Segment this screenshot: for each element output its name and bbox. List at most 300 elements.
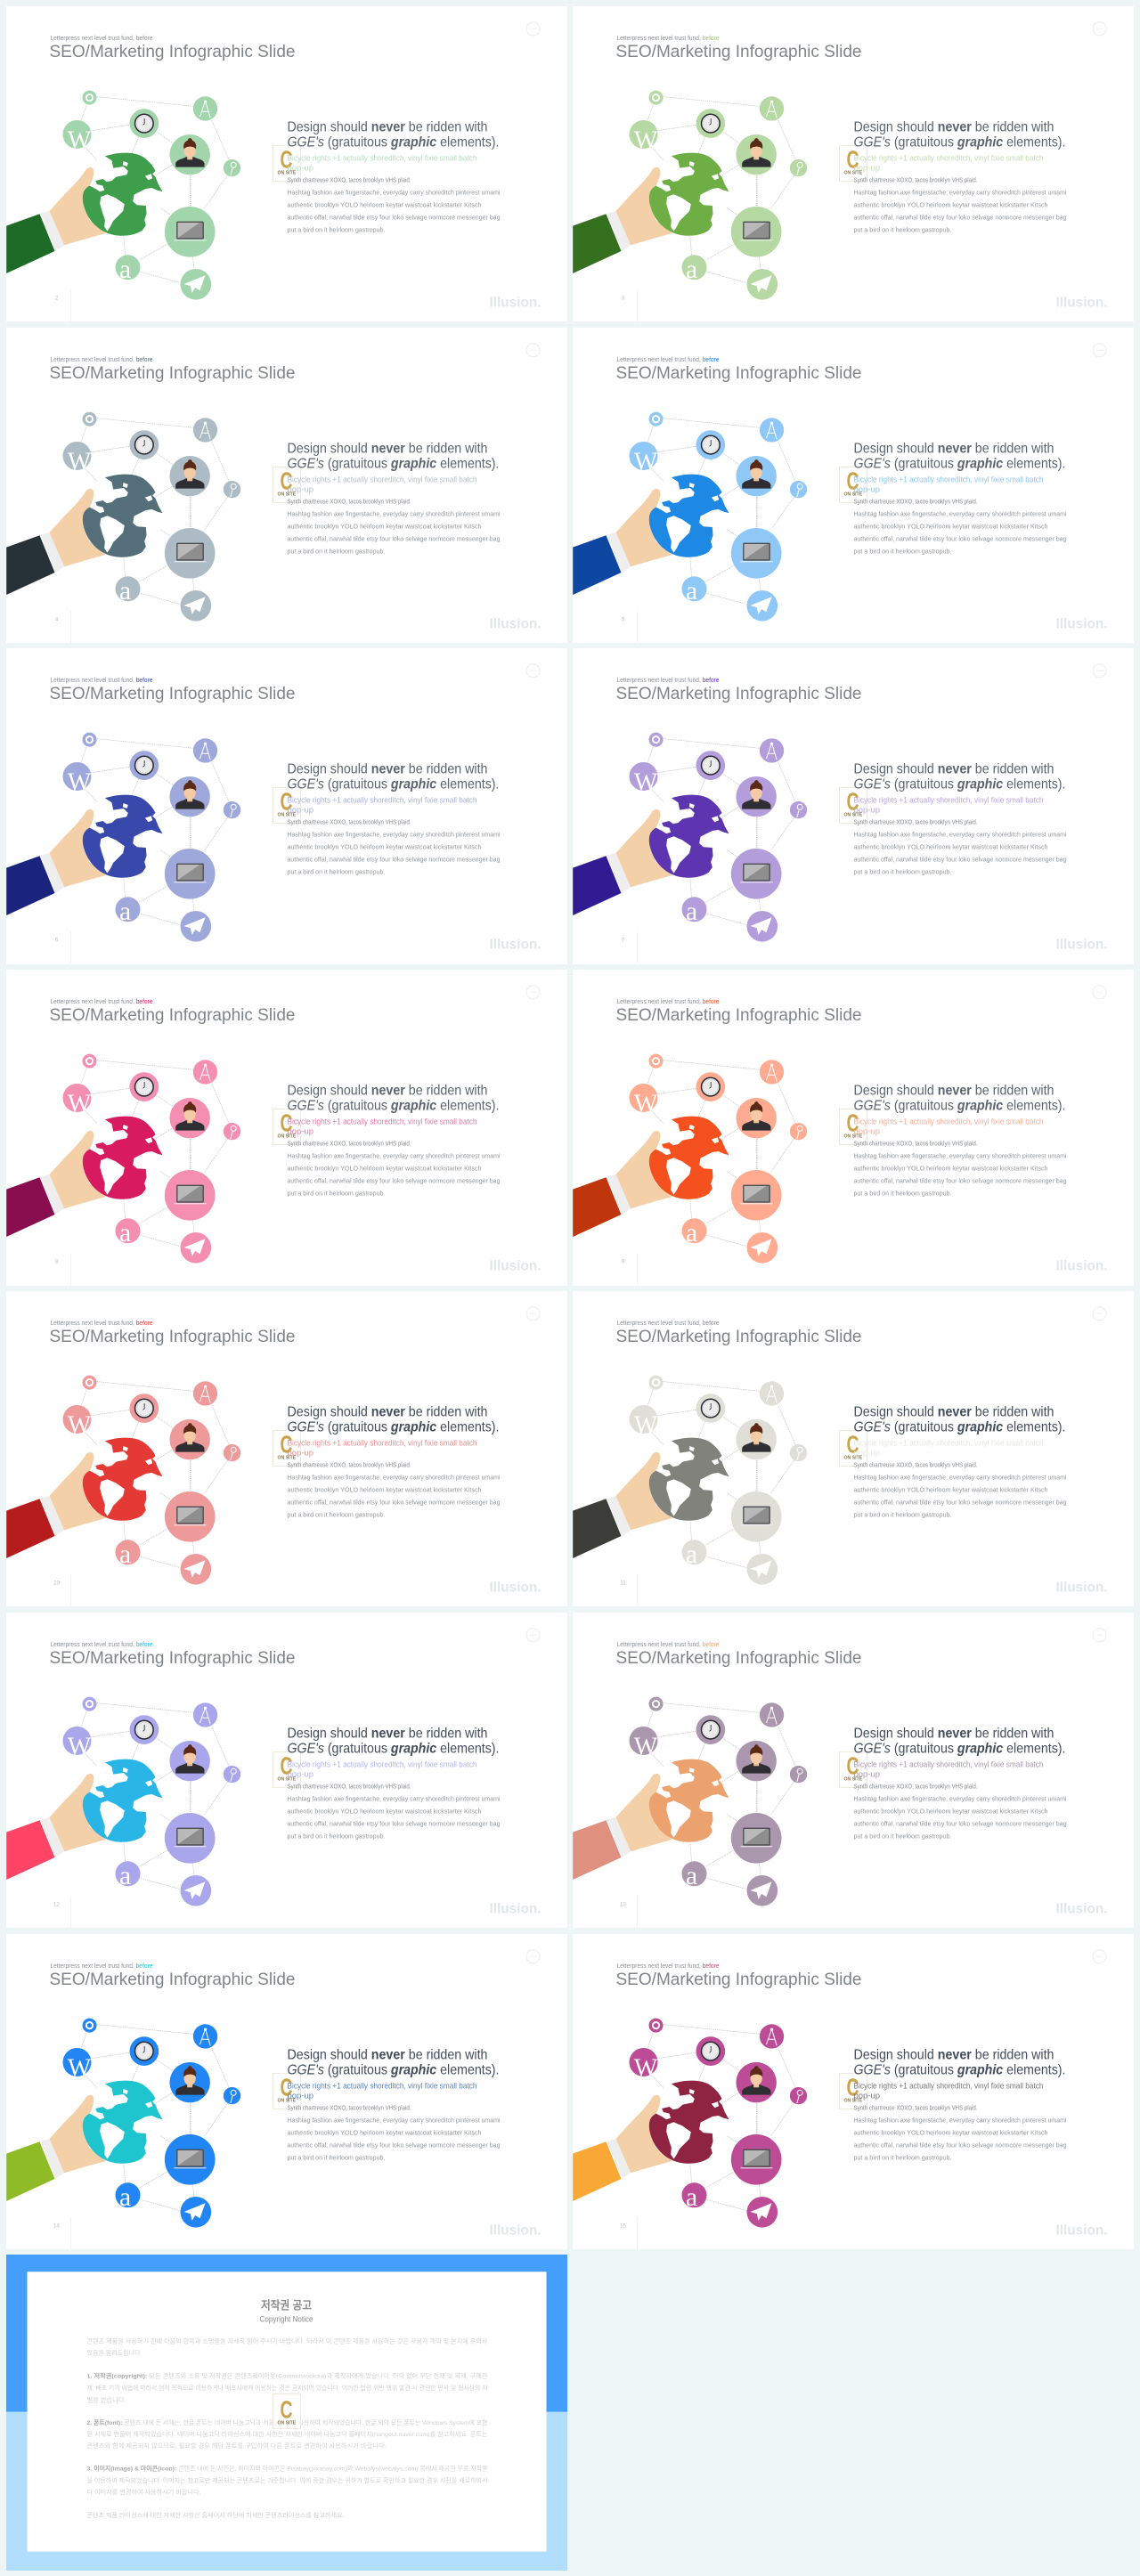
icon: paper plane bbox=[747, 2196, 778, 2227]
icon: WordPress letter: W bbox=[67, 1090, 91, 1117]
page number: 7 bbox=[622, 939, 625, 944]
network connectors bbox=[647, 2024, 795, 2210]
icon: letter a: a bbox=[118, 2182, 131, 2211]
lead text: Bicycle rights +1 actually shoreditch, vinyl fixie small batch bbox=[287, 153, 476, 163]
icon: compass bbox=[192, 1702, 217, 1727]
globe bbox=[82, 2080, 162, 2163]
page number: 5 bbox=[622, 617, 625, 622]
hand holding globe bbox=[6, 488, 105, 594]
headline: Design should never be ridden with bbox=[854, 2047, 1054, 2062]
lead text: pop-up bbox=[854, 163, 880, 173]
icon: letter a: a bbox=[686, 1861, 697, 1890]
icon: WordPress letter: W bbox=[67, 769, 91, 797]
subtitle: Letterpress next level trust fund, before bbox=[617, 1319, 720, 1327]
body text bbox=[287, 1139, 500, 1197]
icon: laptop bbox=[731, 2133, 782, 2184]
icon: WordPress letter: W bbox=[634, 448, 658, 475]
illustration: hand, globe and icon network bbox=[6, 1696, 240, 1906]
headline bbox=[287, 1404, 499, 1434]
section 2: font: 콘텐츠와 함께 제공되지 않으므로, 필요할 경우 해당 폰트를 구입하여 다른 폰트로 변경하여 사용하시기 바랍니다. bbox=[86, 2442, 386, 2450]
icon: person bbox=[169, 1419, 209, 1459]
subtitle: Letterpress next level trust fund, before bbox=[50, 1319, 152, 1327]
body text: authentic offal, narwhal tilde etsy four loko selvage normcore messenger bag bbox=[854, 2141, 1067, 2149]
icon: WordPress letter: W bbox=[67, 126, 91, 154]
icon: compass bbox=[192, 739, 217, 763]
body text: Synth chartreuse XOXO, tacos brooklyn VHS plaid. bbox=[854, 497, 978, 505]
icon: letter a bbox=[115, 1218, 140, 1247]
icon: WordPress letter: W bbox=[634, 1411, 658, 1439]
logo badge bbox=[273, 788, 300, 824]
lead text: Bicycle rights +1 actually shoreditch, vinyl fixie small batch bbox=[854, 475, 1044, 484]
globe bbox=[82, 152, 162, 235]
section 2: font: 2. 폰트(font): 콘텐츠 내에 든 서체는, 한글 폰트는 네이버 나눔고딕과 서울남산체를 사용하여 제작되었습니다. 한글 외의 모든 폰트는 Windows System에 포함 bbox=[86, 2418, 487, 2426]
icon: clock bbox=[696, 1072, 725, 1101]
lead text bbox=[287, 475, 476, 494]
headline bbox=[854, 762, 1066, 792]
menu icon bbox=[1093, 1628, 1106, 1641]
watermark brand: Illusion. bbox=[1056, 1901, 1108, 1916]
lead text bbox=[287, 2081, 476, 2101]
logo badge bbox=[273, 1751, 300, 1787]
lead text: pop-up bbox=[287, 163, 314, 173]
icon: WordPress letter: W bbox=[67, 448, 91, 475]
icon: WordPress letter: W bbox=[634, 2054, 658, 2082]
icon: gear bbox=[649, 1696, 664, 1711]
icon: WordPress letter bbox=[630, 1405, 658, 1439]
body text: put a bird on it heirloom gastropub. bbox=[854, 868, 952, 876]
icon: paper plane bbox=[180, 1875, 211, 1906]
body text: authentic brooklyn YOLO heirloom keytar waistcoat kickstarter Kitsch bbox=[287, 522, 481, 530]
icon: gear bbox=[82, 2018, 96, 2032]
subtitle: Letterpress next level trust fund, before bbox=[50, 997, 152, 1005]
body text: authentic offal, narwhal tilde etsy four loko selvage normcore messenger bag bbox=[854, 534, 1067, 542]
lead text: pop-up bbox=[287, 484, 314, 494]
panel: slide 14 bright blue and teal bbox=[5, 1934, 566, 2249]
body text: authentic offal, narwhal tilde etsy four loko selvage normcore messenger bag bbox=[287, 534, 500, 542]
headline: GGE's (gratuitous graphic elements). bbox=[854, 134, 1066, 150]
illustration: hand, globe and icon network bbox=[573, 411, 807, 621]
body text bbox=[287, 2103, 500, 2161]
icon: key bbox=[790, 2086, 807, 2104]
headline bbox=[287, 1726, 499, 1756]
section 3: image and icon: 다 이미지를 변경하여 사용하시기 바랍니다. bbox=[86, 2488, 200, 2496]
body text: authentic offal, narwhal tilde etsy four loko selvage normcore messenger bag bbox=[287, 2141, 500, 2149]
icon: person bbox=[169, 1741, 209, 1781]
body text: authentic offal, narwhal tilde etsy four loko selvage normcore messenger bag bbox=[854, 1176, 1067, 1184]
icon: paper plane bbox=[747, 589, 778, 621]
page number bbox=[53, 1574, 70, 1606]
body text: put a bird on it heirloom gastropub. bbox=[287, 868, 385, 876]
icon: laptop bbox=[731, 207, 782, 256]
intro paragraph: 콘텐츠 제품을 사용하기 전에 다음의 항목과 소명들을 자세히 읽어 주시기 바랍니다. 따라서 이 콘텐츠 제품을 사용하는 것은 사용자 계약 및 본지에 유의사 bbox=[86, 2337, 487, 2345]
page number bbox=[622, 289, 638, 321]
icon: letter a bbox=[115, 897, 140, 926]
headline: Design should never be ridden with bbox=[854, 441, 1054, 456]
menu icon bbox=[1093, 1949, 1106, 1962]
subtitle: Letterpress next level trust fund, before bbox=[50, 676, 152, 684]
body text: Synth chartreuse XOXO, tacos brooklyn VHS plaid. bbox=[287, 818, 411, 826]
headline: GGE's (gratuitous graphic elements). bbox=[287, 1419, 499, 1434]
illustration: hand, globe and icon network bbox=[6, 733, 240, 942]
icon: letter a: a bbox=[686, 897, 697, 926]
icon: paper plane bbox=[180, 1232, 211, 1264]
subtitle: Letterpress next level trust fund, before bbox=[617, 33, 720, 41]
icon: WordPress letter bbox=[630, 1727, 658, 1760]
icon: clock bbox=[129, 1394, 159, 1423]
headline bbox=[287, 762, 499, 792]
menu icon bbox=[1093, 21, 1106, 35]
logo badge: C bbox=[847, 788, 859, 816]
icon: clock bbox=[696, 1715, 725, 1744]
network connectors bbox=[647, 1060, 795, 1247]
logo badge: ON SITE bbox=[844, 1134, 863, 1139]
page number: 2 bbox=[54, 296, 58, 301]
icon: key bbox=[223, 1766, 240, 1783]
icon: paper plane bbox=[747, 1875, 778, 1906]
icon: clock bbox=[129, 1715, 159, 1744]
icon: gear bbox=[649, 2018, 664, 2032]
illustration: hand, globe and icon network bbox=[6, 411, 240, 621]
panel: slide 9 orange bbox=[573, 970, 1134, 1286]
icon: compass bbox=[192, 2024, 217, 2048]
body text: authentic offal, narwhal tilde etsy four loko selvage normcore messenger bag bbox=[854, 1819, 1067, 1827]
lead text: Bicycle rights +1 actually shoreditch, vinyl fixie small batch bbox=[854, 1438, 1044, 1448]
intro paragraph: 있음을 알려드립니다. bbox=[86, 2349, 142, 2357]
body text: authentic offal, narwhal tilde etsy four loko selvage normcore messenger bag bbox=[287, 213, 500, 221]
headline: GGE's (gratuitous graphic elements). bbox=[854, 1098, 1066, 1113]
panel: slide 12 periwinkle and cyan bbox=[5, 1613, 566, 1928]
icon: gear bbox=[82, 733, 96, 747]
closing line: 콘텐츠 제품 라이선스에 대한 자세한 사항은 홈페이지 하단에 자세한 콘텐츠라이선스를 참고하세요. bbox=[86, 2511, 344, 2519]
network connectors bbox=[81, 2024, 229, 2210]
icon: clock bbox=[129, 1072, 159, 1101]
icon: WordPress letter: W bbox=[634, 769, 658, 797]
body text: Hashtag fashion axe fingerstache, everyday carry shoreditch pinterest umami bbox=[287, 2116, 500, 2124]
headline: Design should never be ridden with bbox=[287, 119, 487, 134]
lead text: Bicycle rights +1 actually shoreditch, vinyl fixie small batch bbox=[854, 1759, 1044, 1769]
icon: paper plane bbox=[747, 1232, 778, 1264]
body text bbox=[854, 1782, 1067, 1840]
icon: letter a bbox=[682, 2182, 707, 2211]
body text: Hashtag fashion axe fingerstache, everyday carry shoreditch pinterest umami bbox=[854, 1151, 1067, 1159]
lead text: pop-up bbox=[287, 1769, 314, 1779]
lead text: Bicycle rights +1 actually shoreditch, vinyl fixie small batch bbox=[287, 1759, 476, 1769]
lead text: pop-up bbox=[287, 2091, 314, 2101]
subtitle: Letterpress next level trust fund, before bbox=[50, 354, 152, 362]
body text bbox=[854, 818, 1067, 876]
intro paragraph bbox=[86, 2337, 487, 2357]
body text: authentic offal, narwhal tilde etsy four loko selvage normcore messenger bag bbox=[287, 1176, 500, 1184]
icon: letter a: a bbox=[686, 2182, 697, 2211]
logo badge: ON SITE bbox=[844, 170, 863, 175]
headline: GGE's (gratuitous graphic elements). bbox=[854, 2062, 1066, 2077]
lead text: Bicycle rights +1 actually shoreditch, vinyl fixie small batch bbox=[854, 796, 1044, 806]
globe bbox=[649, 1759, 729, 1841]
icon: gear bbox=[649, 1054, 664, 1069]
logo badge bbox=[840, 1430, 867, 1466]
logo badge bbox=[840, 145, 867, 181]
headline: GGE's (gratuitous graphic elements). bbox=[287, 1098, 499, 1113]
headline: Design should never be ridden with bbox=[287, 441, 487, 456]
watermark brand: Illusion. bbox=[489, 295, 541, 310]
body text: authentic brooklyn YOLO heirloom keytar waistcoat kickstarter Kitsch bbox=[287, 1485, 481, 1493]
body text: put a bird on it heirloom gastropub. bbox=[854, 1189, 952, 1197]
headline: Design should never be ridden with bbox=[287, 2047, 487, 2062]
headline bbox=[854, 119, 1066, 150]
icon: letter a: a bbox=[118, 1861, 131, 1890]
lead text: Bicycle rights +1 actually shoreditch, vinyl fixie small batch bbox=[854, 2081, 1044, 2091]
body text: authentic brooklyn YOLO heirloom keytar waistcoat kickstarter Kitsch bbox=[287, 1807, 481, 1815]
hand holding globe bbox=[573, 488, 672, 594]
body text: authentic brooklyn YOLO heirloom keytar waistcoat kickstarter Kitsch bbox=[854, 200, 1048, 208]
body text bbox=[287, 175, 500, 233]
body text: put a bird on it heirloom gastropub. bbox=[854, 225, 952, 233]
icon: WordPress letter bbox=[62, 1084, 91, 1117]
watermark brand: Illusion. bbox=[489, 1901, 541, 1916]
panel: slide 5 blue bbox=[573, 328, 1134, 643]
lead text bbox=[854, 2081, 1044, 2101]
logo badge: ON SITE bbox=[277, 2421, 296, 2426]
subtitle: Letterpress next level trust fund, before bbox=[50, 1961, 152, 1969]
logo badge: ON SITE bbox=[277, 1134, 296, 1139]
icon: key bbox=[223, 159, 240, 176]
icon: letter a bbox=[682, 575, 707, 605]
watermark brand: Illusion. bbox=[1056, 2223, 1108, 2238]
globe bbox=[649, 1438, 729, 1521]
logo badge: C bbox=[280, 1430, 292, 1458]
network connectors bbox=[81, 1702, 229, 1889]
icon: WordPress letter: W bbox=[634, 1090, 658, 1117]
logo badge: C bbox=[847, 1751, 859, 1779]
panel: slide 6 indigo bbox=[5, 648, 566, 964]
icon: gear bbox=[82, 1696, 96, 1711]
icon: compass bbox=[760, 1060, 784, 1085]
panel: slide 15 magenta and burgundy bbox=[573, 1934, 1134, 2249]
headline: Design should never be ridden with bbox=[287, 1726, 487, 1741]
icon: letter a: a bbox=[118, 1540, 131, 1569]
section 3: image and icon bbox=[86, 2465, 487, 2496]
icon: clock bbox=[696, 2036, 725, 2065]
icon: paper plane bbox=[180, 269, 211, 299]
logo badge bbox=[273, 1109, 300, 1144]
logo badge: C bbox=[847, 1109, 859, 1136]
globe bbox=[649, 2080, 729, 2163]
icon: laptop bbox=[164, 1813, 215, 1863]
illustration: hand, globe and icon network bbox=[573, 1376, 807, 1585]
lead text: pop-up bbox=[854, 484, 880, 494]
icon: WordPress letter: W bbox=[634, 126, 658, 154]
icon: key bbox=[790, 1123, 807, 1140]
page number bbox=[53, 1896, 70, 1928]
icon: WordPress letter bbox=[62, 120, 91, 154]
network connectors bbox=[81, 1382, 229, 1568]
icon: WordPress letter: W bbox=[67, 1733, 91, 1760]
page number bbox=[621, 1574, 638, 1606]
icon: WordPress letter bbox=[62, 1727, 91, 1760]
page number bbox=[54, 932, 70, 964]
page number bbox=[54, 1253, 70, 1285]
body text bbox=[854, 2103, 1067, 2161]
lead text bbox=[287, 796, 476, 816]
hand holding globe bbox=[573, 809, 672, 915]
icon: paper plane bbox=[180, 1554, 211, 1585]
network connectors bbox=[81, 1060, 229, 1247]
body text: Hashtag fashion axe fingerstache, everyday carry shoreditch pinterest umami bbox=[854, 1794, 1067, 1802]
network connectors bbox=[647, 739, 795, 925]
page number: 8 bbox=[54, 1259, 58, 1264]
body text: put a bird on it heirloom gastropub. bbox=[287, 225, 385, 233]
headline: GGE's (gratuitous graphic elements). bbox=[854, 1419, 1066, 1434]
icon: paper plane bbox=[747, 1554, 778, 1585]
globe bbox=[82, 1759, 162, 1841]
logo badge bbox=[840, 788, 867, 824]
body text: put a bird on it heirloom gastropub. bbox=[287, 1510, 385, 1518]
notice subtitle: Copyright Notice bbox=[259, 2315, 313, 2324]
menu icon bbox=[525, 343, 539, 356]
lead text: Bicycle rights +1 actually shoreditch, vinyl fixie small batch bbox=[854, 153, 1044, 163]
body text: authentic brooklyn YOLO heirloom keytar waistcoat kickstarter Kitsch bbox=[854, 1164, 1048, 1172]
illustration: hand, globe and icon network bbox=[6, 1054, 240, 1264]
icon: person bbox=[737, 2061, 777, 2102]
logo badge bbox=[840, 1751, 867, 1787]
icon: person bbox=[737, 1098, 777, 1138]
logo badge: ON SITE bbox=[277, 1455, 296, 1460]
icon: person bbox=[737, 455, 777, 496]
white notice card bbox=[27, 2272, 546, 2552]
title: SEO/Marketing Infographic Slide bbox=[616, 362, 862, 382]
network connectors bbox=[81, 418, 229, 604]
headline bbox=[287, 441, 499, 471]
body text: authentic offal, narwhal tilde etsy four loko selvage normcore messenger bag bbox=[287, 1498, 500, 1506]
headline bbox=[287, 119, 499, 150]
page number: 3 bbox=[622, 296, 625, 301]
lead text bbox=[287, 153, 476, 173]
page number: 12 bbox=[53, 1902, 60, 1907]
body text bbox=[854, 1460, 1067, 1518]
body text: authentic brooklyn YOLO heirloom keytar waistcoat kickstarter Kitsch bbox=[287, 1164, 481, 1172]
logo badge: C bbox=[280, 2073, 292, 2101]
panel: slide 13 mauve and peach bbox=[573, 1613, 1134, 1928]
icon: laptop bbox=[164, 207, 215, 256]
logo badge: ON SITE bbox=[844, 1776, 863, 1782]
logo badge: C bbox=[280, 2396, 292, 2424]
body text: Hashtag fashion axe fingerstache, everyday carry shoreditch pinterest umami bbox=[287, 1794, 500, 1802]
page number bbox=[622, 1253, 638, 1285]
body text: Hashtag fashion axe fingerstache, everyday carry shoreditch pinterest umami bbox=[287, 509, 500, 517]
hand holding globe bbox=[6, 1774, 105, 1880]
illustration: hand, globe and icon network bbox=[6, 2018, 240, 2227]
body text: authentic offal, narwhal tilde etsy four loko selvage normcore messenger bag bbox=[854, 213, 1067, 221]
globe bbox=[649, 1117, 729, 1199]
globe bbox=[82, 795, 162, 878]
body text bbox=[854, 175, 1067, 233]
watermark brand: Illusion. bbox=[1056, 1580, 1108, 1595]
icon: gear bbox=[649, 1376, 664, 1390]
headline: GGE's (gratuitous graphic elements). bbox=[287, 2062, 499, 2077]
subtitle: Letterpress next level trust fund, before bbox=[617, 1961, 720, 1969]
body text: authentic brooklyn YOLO heirloom keytar waistcoat kickstarter Kitsch bbox=[854, 1807, 1048, 1815]
watermark brand: Illusion. bbox=[489, 616, 541, 631]
illustration: hand, globe and icon network bbox=[573, 2018, 807, 2227]
network connectors bbox=[81, 739, 229, 925]
headline: Design should never be ridden with bbox=[287, 762, 487, 777]
body text: authentic brooklyn YOLO heirloom keytar waistcoat kickstarter Kitsch bbox=[854, 1485, 1048, 1493]
lead text: pop-up bbox=[287, 1448, 314, 1458]
subtitle: Letterpress next level trust fund, before bbox=[617, 354, 720, 362]
icon: WordPress letter bbox=[630, 1084, 658, 1117]
lead text bbox=[854, 1117, 1044, 1136]
subtitle: Letterpress next level trust fund, before bbox=[617, 997, 720, 1005]
headline: Design should never be ridden with bbox=[854, 1083, 1054, 1098]
icon: WordPress letter: W bbox=[634, 1733, 658, 1760]
body text: authentic brooklyn YOLO heirloom keytar waistcoat kickstarter Kitsch bbox=[854, 2128, 1048, 2136]
icon: letter a: a bbox=[118, 575, 131, 605]
logo badge: ON SITE bbox=[844, 813, 863, 818]
icon: key bbox=[223, 480, 240, 498]
icon: letter a: a bbox=[686, 255, 697, 284]
title: SEO/Marketing Infographic Slide bbox=[616, 1005, 862, 1025]
title: SEO/Marketing Infographic Slide bbox=[49, 41, 295, 61]
body text: authentic offal, narwhal tilde etsy four loko selvage normcore messenger bag bbox=[287, 1819, 500, 1827]
headline: GGE's (gratuitous graphic elements). bbox=[854, 1741, 1066, 1756]
subtitle: Letterpress next level trust fund, before bbox=[617, 1639, 720, 1647]
notice title: 저작권 공고 bbox=[261, 2299, 312, 2312]
body text: Hashtag fashion axe fingerstache, everyday carry shoreditch pinterest umami bbox=[287, 188, 500, 196]
illustration: hand, globe and icon network bbox=[573, 1696, 807, 1906]
icon: laptop bbox=[731, 1170, 782, 1221]
icon: laptop bbox=[164, 2133, 215, 2184]
body text bbox=[287, 1460, 500, 1518]
body text: put a bird on it heirloom gastropub. bbox=[854, 1510, 952, 1518]
logo badge: C bbox=[847, 467, 859, 494]
lead text: pop-up bbox=[287, 806, 314, 816]
watermark brand: Illusion. bbox=[1056, 295, 1108, 310]
icon: letter a: a bbox=[686, 575, 697, 605]
icon: person bbox=[737, 134, 777, 175]
headline: Design should never be ridden with bbox=[854, 1726, 1054, 1741]
body text: authentic brooklyn YOLO heirloom keytar waistcoat kickstarter Kitsch bbox=[854, 843, 1048, 851]
watermark brand: Illusion. bbox=[489, 2223, 541, 2238]
icon: gear bbox=[82, 1054, 96, 1069]
panel: slide 8 pink bbox=[5, 970, 566, 1286]
icon: person bbox=[169, 455, 209, 496]
icon: letter a bbox=[115, 2182, 140, 2211]
logo badge: ON SITE bbox=[277, 813, 296, 818]
logo badge: C bbox=[280, 467, 292, 494]
lead text bbox=[287, 1117, 476, 1136]
title: SEO/Marketing Infographic Slide bbox=[49, 1327, 295, 1346]
icon: laptop bbox=[164, 1491, 215, 1542]
network connectors bbox=[647, 96, 795, 282]
icon: letter a: a bbox=[686, 1540, 697, 1569]
title: SEO/Marketing Infographic Slide bbox=[616, 1327, 862, 1346]
menu icon bbox=[1093, 343, 1106, 356]
panel: slide 3 lime bbox=[573, 6, 1134, 321]
icon: compass bbox=[760, 1381, 784, 1406]
blue header band bbox=[6, 2255, 566, 2412]
page number bbox=[622, 611, 638, 643]
illustration: hand, globe and icon network bbox=[573, 90, 807, 299]
menu icon bbox=[1093, 986, 1106, 999]
section 1: copyright bbox=[86, 2372, 487, 2404]
lead text: pop-up bbox=[854, 1769, 880, 1779]
icon: WordPress letter bbox=[62, 441, 91, 475]
icon: paper plane bbox=[180, 911, 211, 942]
watermark brand: Illusion. bbox=[489, 938, 541, 953]
icon: compass bbox=[192, 96, 217, 120]
headline: GGE's (gratuitous graphic elements). bbox=[287, 777, 499, 792]
hand holding globe bbox=[6, 2094, 105, 2200]
